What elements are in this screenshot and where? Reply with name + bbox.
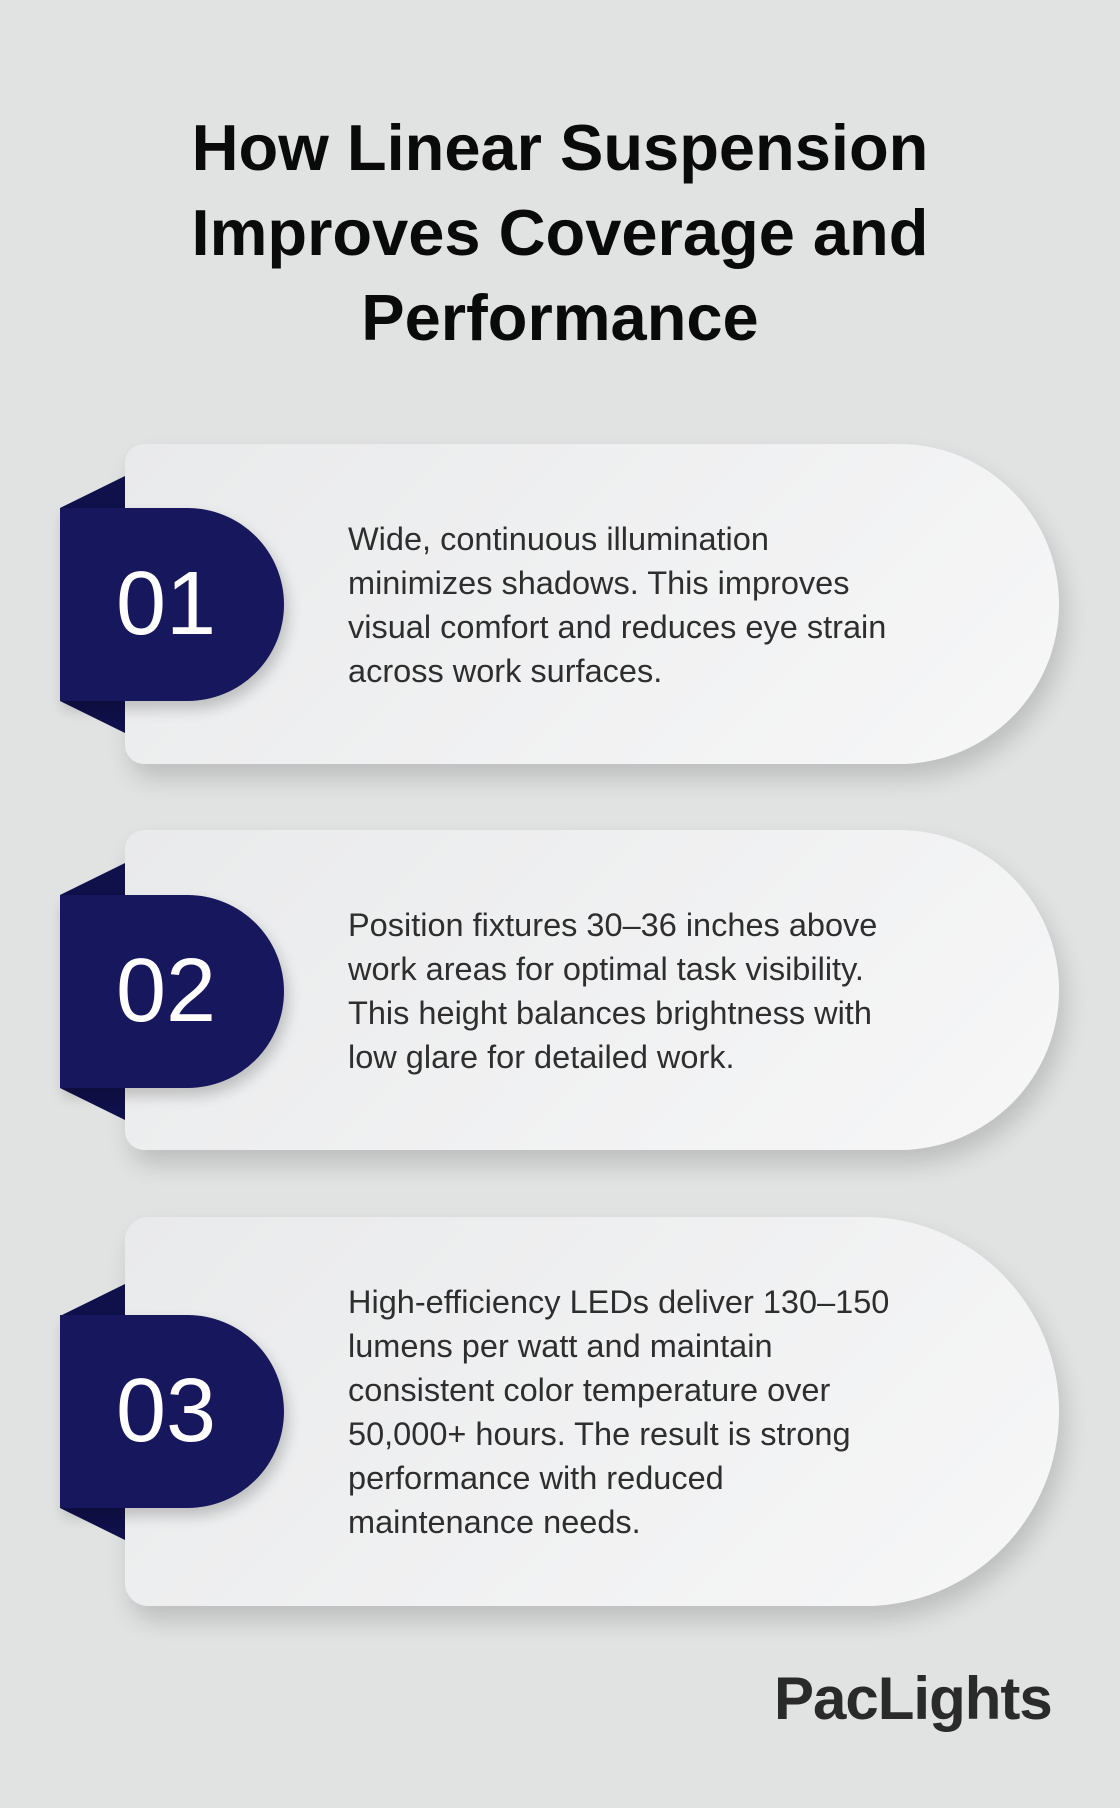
text 3: consistent color temperature over	[348, 1372, 830, 1408]
panel: card 1	[125, 444, 1059, 764]
badge 02	[60, 895, 284, 1088]
text 2: work areas for optimal task visibility.	[348, 951, 864, 987]
fold bottom 2	[60, 1088, 125, 1120]
text 2: low glare for detailed work.	[348, 1039, 735, 1075]
badge 02: 02	[116, 941, 216, 1041]
title: How Linear Suspension	[192, 111, 928, 184]
badge 03: 03	[116, 1361, 216, 1461]
text 3: maintenance needs.	[348, 1504, 641, 1540]
fold top 3	[60, 1284, 125, 1316]
text 3: High-efficiency LEDs deliver 130–150	[348, 1284, 889, 1320]
text 2	[348, 907, 877, 1075]
text 3: 50,000+ hours. The result is strong	[348, 1416, 851, 1452]
fold top 2	[60, 863, 125, 895]
title	[192, 111, 928, 354]
text 1: visual comfort and reduces eye strain	[348, 609, 886, 645]
fold bottom 1	[60, 701, 125, 733]
text 1: Wide, continuous illumination	[348, 521, 769, 557]
title: Performance	[361, 281, 759, 354]
fold bottom 3	[60, 1508, 125, 1540]
badge 01: 01	[116, 554, 216, 654]
text 2: This height balances brightness with	[348, 995, 872, 1031]
panel: card 2	[125, 830, 1059, 1150]
text 3: performance with reduced	[348, 1460, 724, 1496]
text 1: minimizes shadows. This improves	[348, 565, 850, 601]
text 3: lumens per watt and maintain	[348, 1328, 773, 1364]
badge 01	[60, 508, 284, 701]
panel: card 3	[125, 1217, 1059, 1606]
text 1: across work surfaces.	[348, 653, 662, 689]
title: Improves Coverage and	[192, 196, 928, 269]
badge 03	[60, 1315, 284, 1508]
text 3	[348, 1284, 889, 1540]
logo: PacLights	[774, 1665, 1052, 1732]
text 1	[348, 521, 886, 689]
text 2: Position fixtures 30–36 inches above	[348, 907, 877, 943]
fold top 1	[60, 476, 125, 508]
